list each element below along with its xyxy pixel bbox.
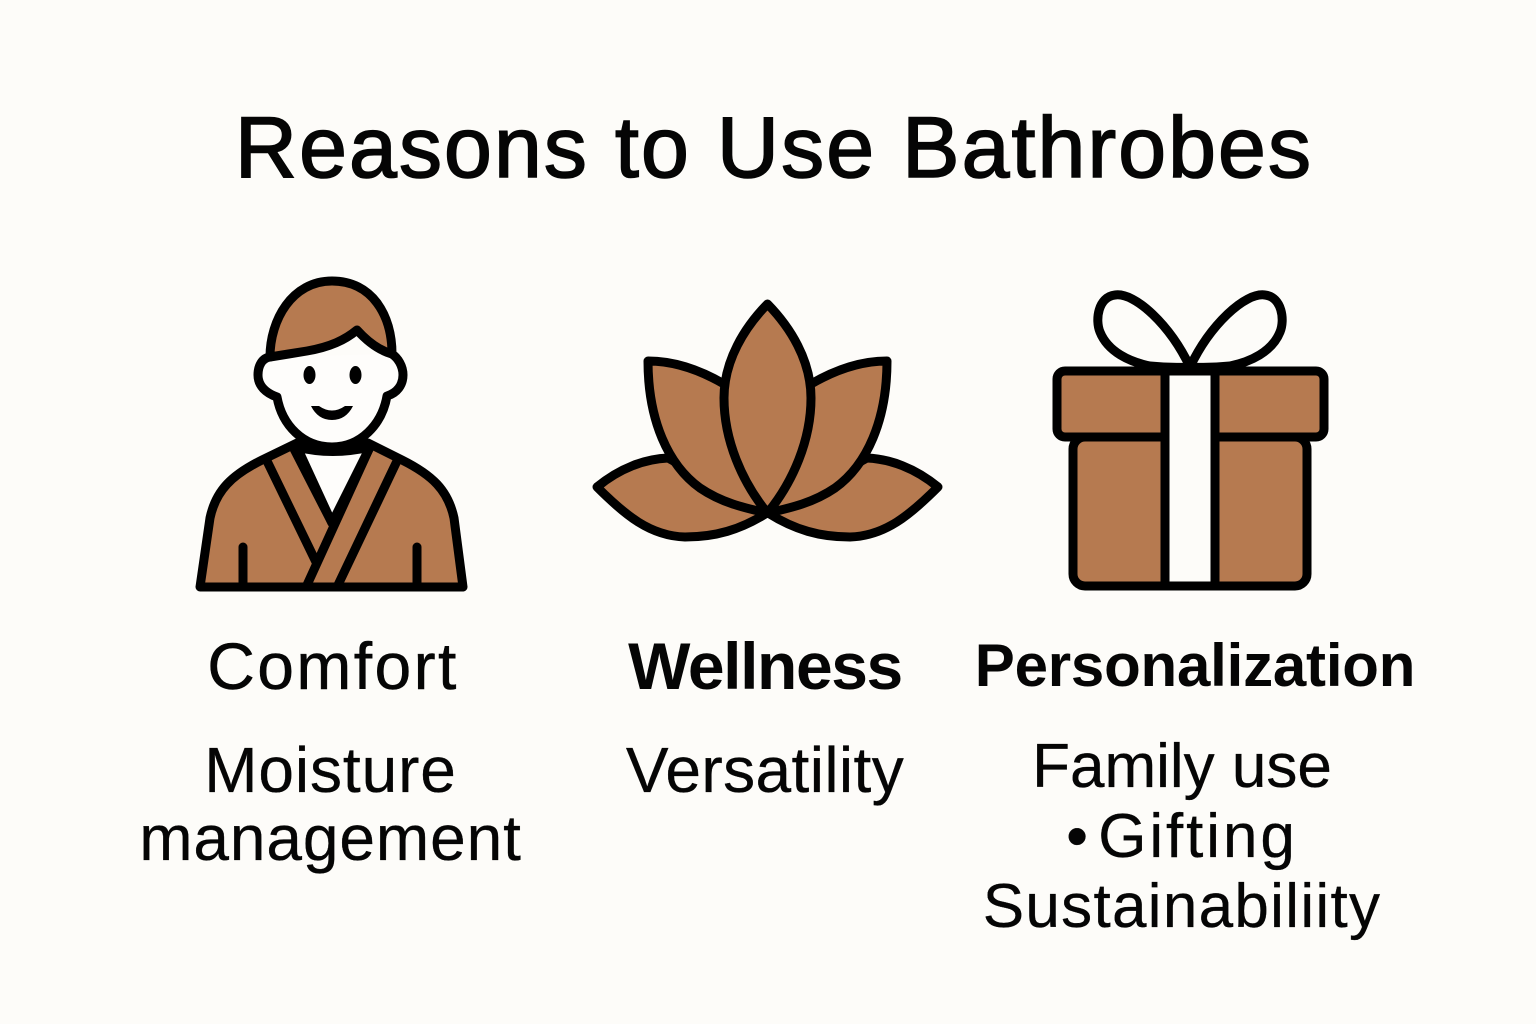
label: Wellness: Wellness: [628, 629, 902, 703]
middle left petal: [648, 361, 767, 513]
hair: [270, 281, 392, 357]
middle right petal: [768, 361, 887, 513]
text: Family use, Gifting, Sustainability: Family use: [1032, 732, 1332, 801]
left eye: [304, 366, 316, 384]
text: Moisture management: [139, 734, 522, 874]
robe body: [200, 443, 463, 587]
left bow loop: [1098, 295, 1190, 367]
robe collar lines: [267, 447, 397, 585]
title: Reasons to Use Bathrobes: [235, 100, 1313, 196]
text: Family use, Gifting, Sustainability: [983, 732, 1381, 941]
right bow loop: [1190, 295, 1282, 367]
icon: person in bathrobe: [200, 281, 463, 587]
box body: [1073, 437, 1307, 586]
icon: lotus flower: [597, 304, 938, 537]
neck opening: [297, 447, 370, 523]
label: Personalization: Personalization: [975, 632, 1415, 699]
label: Comfort: Comfort: [207, 629, 459, 703]
right eye: [350, 366, 362, 384]
smile: [311, 406, 353, 420]
text: Versatility: Versatility: [626, 734, 904, 806]
lower right petal: [768, 458, 938, 537]
text: Moisture management: management: [139, 802, 522, 874]
text: Family use, Gifting, Sustainability: Sustainabiliity: [983, 872, 1381, 941]
lower left petal: [597, 458, 767, 537]
icon: gift box: [1057, 295, 1324, 586]
robe sleeve lines: [243, 547, 417, 587]
box lid: [1057, 371, 1324, 437]
face and ears: [258, 354, 403, 447]
text: Family use, Gifting, Sustainability: • Gifting: [1066, 802, 1298, 871]
centre petal: [724, 304, 811, 513]
text: Moisture management: Moisture: [204, 734, 457, 806]
vertical ribbon: [1165, 371, 1215, 586]
